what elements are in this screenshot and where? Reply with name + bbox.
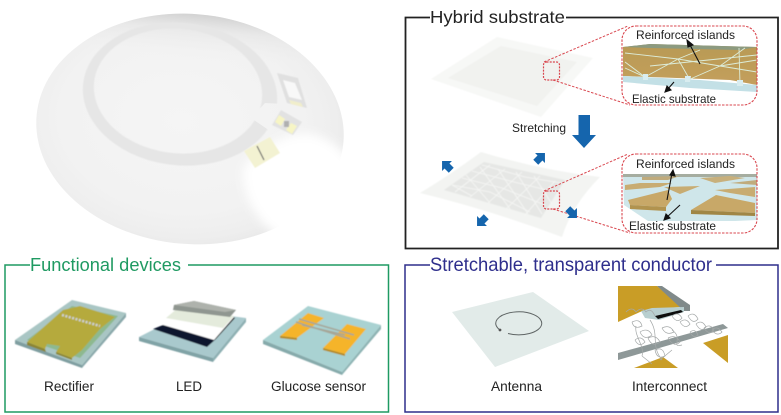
inset surface [623,174,757,221]
panel: hybrid substrate [406,7,778,248]
arrow: elastic substrate [665,82,674,92]
device: antenna [452,292,589,367]
arrow: elastic substrate [664,205,680,220]
lens highlight [243,134,360,243]
chip: LED [272,110,302,135]
label: glucose sensor: Glucose sensor [271,379,367,394]
frame [405,265,778,412]
device: glucose sensor [263,306,381,375]
arrows: stretch directions [437,148,582,231]
label: elastic substrate: Elastic substrate [629,219,716,233]
heading: Stretchable, transparent conductor [430,255,713,276]
sheet: stretched [420,152,600,237]
label: antenna: Antenna [491,379,542,394]
arrow: reinforced islands [667,170,675,200]
label: elastic substrate: Elastic substrate [632,92,716,106]
panel: contact lens illustration [36,14,344,244]
label: rectifier: Rectifier [44,379,95,394]
frame [406,18,778,248]
zoom lines top [544,26,630,105]
frame [5,265,388,412]
heading: Hybrid substrate [430,7,565,27]
device: interconnect [618,286,728,368]
inset: reinforced islands after stretching [622,154,757,233]
inset frame [622,154,757,233]
device: LED [139,301,246,362]
zoom lines bottom [544,154,630,233]
sheet: unstretched [431,37,593,117]
arrow: stretching [572,115,596,148]
arrow: reinforced islands [687,40,700,64]
label: interconnect: Interconnect [632,379,707,394]
zoom source square top [544,62,560,80]
lens body [27,1,353,257]
panel: functional devices [5,255,388,412]
inset frame [622,26,757,105]
inset: reinforced islands before stretching [622,26,757,106]
chip: rectifier [277,73,307,108]
label: stretching: Stretching [512,121,566,135]
label: reinforced islands: Reinforced islands [636,157,735,171]
heading: Functional devices [30,255,181,275]
label: LED: LED [176,379,202,394]
chip: sensor [244,137,280,168]
panel: stretchable, transparent conductor [405,255,778,412]
zoom source square bottom [544,191,560,209]
label: reinforced islands: Reinforced islands [636,28,735,42]
inset surface [623,44,757,92]
device: rectifier [15,300,126,368]
antenna ring [83,22,277,166]
